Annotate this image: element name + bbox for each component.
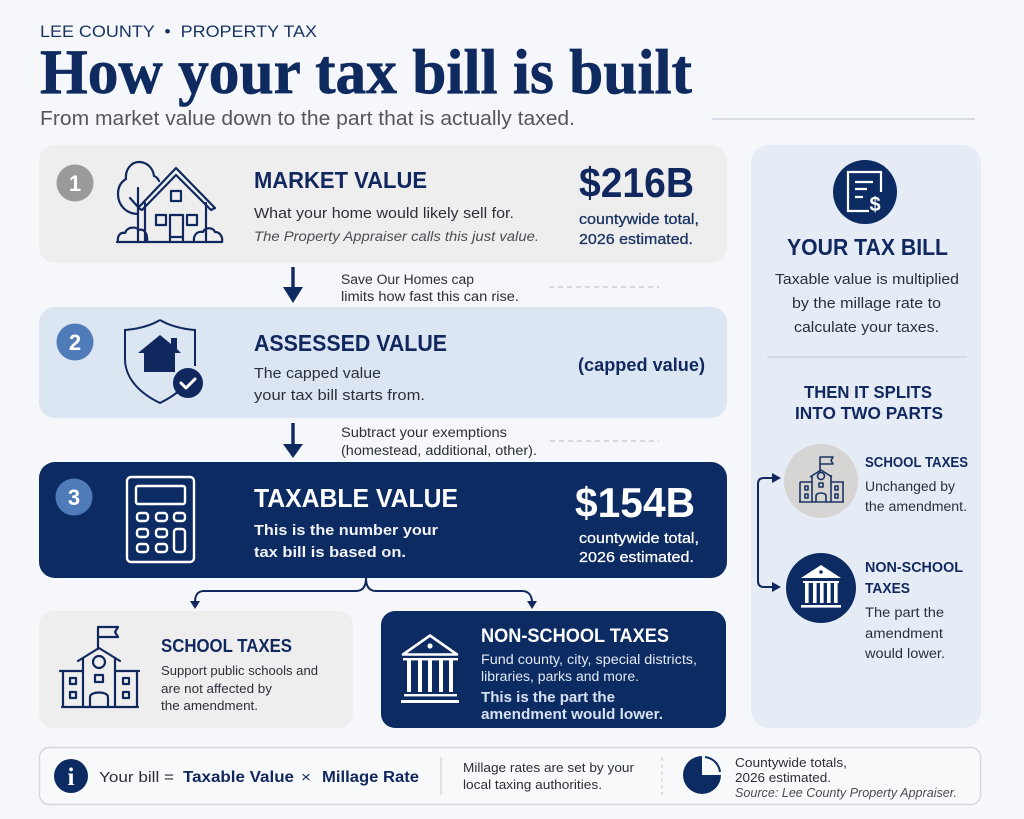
- stat: $154B: [575, 479, 699, 566]
- description: assessed value: [254, 365, 425, 404]
- note: countywide totals and source: Countywide totals,: [735, 755, 847, 770]
- description: non-school taxes: This is the part the: [481, 690, 615, 706]
- label: non-school taxes: [864, 560, 963, 661]
- arrow: branch to school and non-school: [190, 578, 537, 609]
- panel: taxable value: [39, 462, 727, 578]
- note: countywide totals and source: 2026 estimated.: [735, 770, 831, 785]
- description: taxable value: tax bill is based on.: [254, 544, 406, 561]
- formula: [99, 769, 419, 786]
- description: non-school taxes: Fund county, city, special districts,: [481, 652, 697, 667]
- stat: $154B: 2026 estimated.: [579, 550, 694, 566]
- label: school taxes: Unchanged by: [865, 479, 955, 494]
- label: non-school taxes: would lower.: [864, 646, 945, 661]
- description: taxable value: This is the number your: [254, 522, 438, 539]
- heading: then it splits: [795, 382, 943, 423]
- arrow: split bracket: [758, 473, 781, 592]
- heading: then it splits: INTO TWO PARTS: [795, 403, 943, 423]
- label: non-school taxes: amendment: [865, 626, 943, 641]
- title: How your tax bill is built: [40, 37, 692, 107]
- icon: school building: [60, 627, 139, 707]
- description: non-school taxes: amendment would lower.: [481, 707, 663, 723]
- icon: house and tree: [117, 162, 222, 242]
- header: [40, 22, 692, 130]
- eyebrow: LEE COUNTY • PROPERTY TAX: [40, 22, 317, 41]
- note: save our homes cap: Save Our Homes cap: [341, 272, 474, 287]
- stat: $216B: $216B: [579, 159, 694, 206]
- description: non-school taxes: libraries, parks and more.: [481, 669, 639, 684]
- heading: market value: MARKET VALUE: [254, 167, 427, 193]
- label: school taxes: the amendment.: [865, 499, 967, 514]
- note: save our homes cap: [341, 272, 519, 304]
- icon: info: [54, 759, 88, 793]
- stat: $216B: countywide total,: [579, 212, 699, 228]
- step badge 3: 3: [68, 485, 80, 510]
- note: countywide totals and source: [735, 755, 957, 800]
- stat: $154B: $154B: [575, 479, 695, 526]
- description: non-school taxes: [481, 652, 697, 723]
- description: school taxes: the amendment.: [161, 698, 258, 713]
- icon: info: i: [68, 764, 75, 791]
- description: school taxes: Support public schools and: [161, 663, 318, 678]
- panel: assessed value: [39, 307, 727, 418]
- step badge 1: 1: [69, 171, 81, 196]
- description: taxable value: [254, 522, 438, 561]
- step badge 2: [56, 324, 94, 360]
- heading: your tax bill: YOUR TAX BILL: [787, 234, 948, 260]
- panel: non-school taxes: [381, 611, 726, 728]
- stat: $216B: [579, 159, 699, 248]
- heading: taxable value: TAXABLE VALUE: [254, 483, 458, 513]
- icon: government building in circle: [786, 553, 856, 623]
- arrow: assessed to taxable: [283, 423, 303, 458]
- description: market value: What your home would likely sell for.: [254, 205, 514, 222]
- icon: pie chart: [683, 756, 721, 794]
- description: school taxes: are not affected by: [161, 681, 273, 696]
- panel: market value: [39, 145, 727, 263]
- description: market value: [254, 205, 539, 244]
- label: capped value: (capped value): [578, 355, 705, 375]
- footer bar: [40, 748, 980, 804]
- description: your tax bill: [775, 271, 959, 336]
- label: non-school taxes: The part the: [865, 605, 944, 620]
- note: millage rates: local taxing authorities.: [463, 777, 602, 792]
- formula: ×: [301, 769, 311, 786]
- heading: assessed value: ASSESSED VALUE: [254, 330, 447, 356]
- icon: bill with dollar sign: $: [869, 194, 881, 216]
- description: assessed value: your tax bill starts from.: [254, 387, 425, 404]
- stat: $216B: 2026 estimated.: [579, 232, 693, 248]
- step badge 2: 2: [69, 330, 81, 355]
- heading: school taxes: SCHOOL TAXES: [161, 636, 292, 656]
- description: assessed value: The capped value: [254, 365, 381, 382]
- description: your tax bill: calculate your taxes.: [794, 319, 939, 336]
- heading: non-school taxes: NON-SCHOOL TAXES: [481, 626, 669, 647]
- icon: school in circle: [784, 444, 858, 518]
- panel: school taxes: [39, 611, 353, 728]
- icon: bill with dollar sign: [833, 160, 897, 224]
- note: millage rates: Millage rates are set by your: [463, 760, 635, 775]
- note: save our homes cap: limits how fast this can rise.: [341, 289, 519, 304]
- icon: government building: [401, 636, 459, 703]
- description: your tax bill: by the millage rate to: [792, 295, 941, 312]
- heading: then it splits: THEN IT SPLITS: [804, 382, 932, 402]
- note: subtract exemptions: (homestead, additional, other).: [341, 443, 537, 458]
- note: countywide totals and source: Source: Lee County Property Appraiser.: [735, 786, 957, 800]
- formula: Your bill =: [99, 769, 174, 786]
- formula: Taxable Value: [183, 769, 294, 786]
- note: subtract exemptions: [341, 425, 537, 458]
- arrow: market to assessed: [283, 267, 303, 303]
- icon: shield with house and check: [125, 320, 203, 403]
- subtitle: From market value down to the part that is actually taxed.: [40, 108, 575, 130]
- label: school taxes: [865, 455, 968, 514]
- icon: calculator: [127, 477, 194, 562]
- note: subtract exemptions: Subtract your exemptions: [341, 425, 507, 440]
- label: non-school taxes: NON-SCHOOL: [865, 560, 963, 576]
- label: school taxes: SCHOOL TAXES: [865, 455, 968, 471]
- label: non-school taxes: TAXES: [865, 581, 910, 597]
- description: market value: The Property Appraiser calls this just value.: [254, 229, 539, 244]
- description: your tax bill: Taxable value is multiplied: [775, 271, 959, 288]
- step badge 1: [56, 164, 94, 202]
- formula: Millage Rate: [322, 769, 419, 786]
- description: school taxes: [161, 663, 318, 713]
- stat: $154B: countywide total,: [579, 531, 699, 547]
- step badge 3: [56, 478, 92, 516]
- note: millage rates: [463, 760, 635, 792]
- panel: your tax bill: [751, 145, 981, 728]
